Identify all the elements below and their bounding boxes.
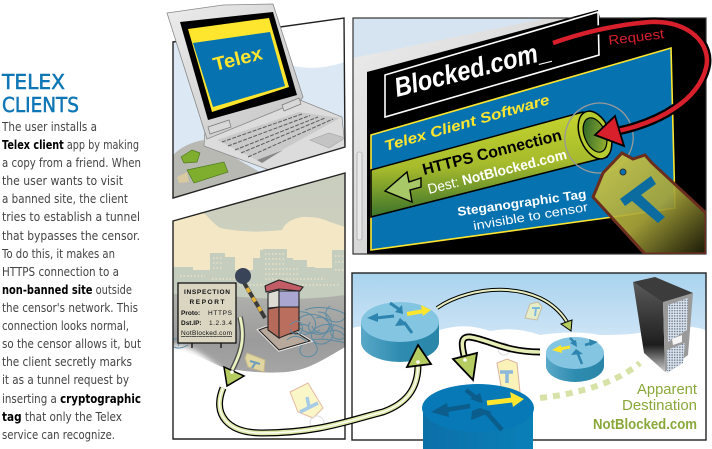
body paragraph: Telex client app by making (2, 137, 139, 152)
apparent destination label (593, 381, 698, 433)
body paragraph: a banned site, the client (2, 191, 128, 206)
blue software window (371, 48, 675, 250)
body paragraph: that bypasses the censor. (2, 228, 140, 243)
tag faint (290, 383, 324, 430)
tag fading (245, 353, 265, 372)
ground shadow (173, 294, 345, 373)
body paragraph: The user installs a (1, 119, 97, 134)
arrow: router to right router (437, 290, 572, 331)
body paragraph: tries to establish a tunnel (2, 209, 140, 224)
big router (422, 384, 534, 449)
body paragraph: a copy from a friend. When (2, 155, 141, 170)
panel: laptop with Telex (167, 4, 345, 200)
guard booth (259, 280, 310, 350)
faint tags (525, 302, 542, 320)
large tag (497, 343, 520, 392)
inspection report sign: INSPECTION (184, 289, 230, 296)
inspection report sign: Proto: (181, 310, 200, 317)
body paragraph: To do this, it makes an (1, 246, 115, 261)
steganographic tag label: Steganographic Tag (456, 187, 587, 219)
body paragraph: it as a tunnel request by (2, 372, 129, 387)
window title: Telex Client Software (383, 92, 551, 155)
body paragraph: the client secretly marks (2, 354, 132, 369)
steganographic tag label: invisible to censor (472, 200, 589, 233)
body paragraph: inserting a cryptographic (2, 391, 141, 406)
body paragraph: service can recognize. (2, 427, 115, 442)
city skyline (174, 249, 344, 299)
arrow: right router back to big router (453, 337, 540, 380)
https tunnel: Dest: NotBlocked.com (426, 146, 568, 197)
inspection report sign: Dst.IP: (181, 320, 202, 327)
laptop hinges (208, 98, 301, 134)
left router (361, 302, 439, 362)
gate barrier (235, 268, 265, 318)
arrow: client through censor (224, 317, 244, 386)
white foreground (174, 348, 344, 438)
body paragraph (1, 119, 141, 442)
panel: censor inspection (172, 172, 346, 440)
re-drawn wire over booth (287, 321, 307, 342)
usb stick and cap (177, 150, 228, 183)
tag dashes (540, 363, 640, 398)
red request arrow: Request (608, 26, 665, 48)
body paragraph: the user wants to visit (2, 173, 123, 188)
address bar: Blocked.com_ (391, 35, 554, 103)
https tunnel (371, 106, 618, 217)
body paragraph: the censor's network. This (2, 300, 138, 315)
apparent destination label: NotBlocked.com (593, 416, 697, 433)
body paragraph: non-banned site outside (2, 282, 132, 297)
sidebar text: Telex clients (1, 70, 141, 442)
screen label: Telex (211, 43, 265, 76)
body paragraph: so the censor allows it, but (2, 336, 141, 351)
steganographic tag label (456, 187, 589, 233)
panel: Telex client software screen (353, 10, 707, 254)
right router (546, 337, 604, 382)
barbed wire (173, 306, 345, 357)
arrow: to first router (220, 345, 431, 433)
heading (1, 70, 79, 117)
apparent destination label: Destination (622, 397, 697, 414)
heading: TELEX (1, 70, 65, 94)
body paragraph: HTTPS connection to a (2, 264, 119, 279)
inspection report sign (178, 283, 236, 348)
red request arrow (553, 22, 707, 146)
address bar (385, 12, 599, 117)
https tunnel: HTTPS Connection (421, 127, 564, 179)
body paragraph: connection looks normal, (2, 318, 129, 333)
apparent destination label: Apparent (637, 381, 698, 398)
panel: routers and apparent destination (352, 273, 706, 449)
laptop base (204, 100, 345, 171)
body paragraph: tag that only the Telex (2, 409, 122, 424)
heading: CLIENTS (2, 93, 79, 117)
laptop lid (167, 4, 303, 139)
inspection report sign: HTTPS (208, 310, 233, 317)
inspection report sign: NotBlocked.com (181, 330, 232, 337)
inspection report sign: 1.2.3.4 (209, 320, 232, 327)
tag with T (564, 102, 706, 254)
inspection report sign: REPORT (190, 299, 225, 306)
server tower (633, 277, 693, 373)
